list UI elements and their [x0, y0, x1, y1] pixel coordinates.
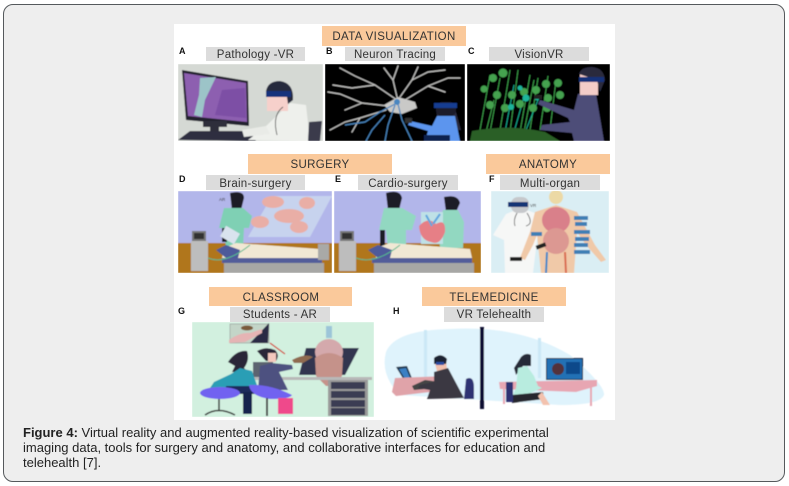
heading: telemedicine	[422, 287, 566, 306]
heading: surgery: SURGERY	[290, 159, 350, 171]
heading: telemedicine: TELEMEDICINE	[449, 292, 539, 304]
label: H VR Telehealth: H	[393, 306, 400, 316]
label: F Multi-organ: F	[489, 174, 495, 184]
label: B Neuron Tracing: B	[326, 46, 333, 56]
illustration F: multi-organ anatomy	[491, 190, 609, 273]
illustration E: cardio surgery with AR: AR	[388, 196, 395, 201]
label: H VR Telehealth	[393, 306, 544, 322]
caption: telehealth [7].	[23, 455, 101, 470]
caption: imaging data, tools for surgery and anatomy, and collaborative interfaces for education and	[23, 440, 545, 455]
label: E Cardio-surgery: E	[335, 174, 341, 184]
label: G Students-AR: Students - AR	[243, 309, 317, 321]
heading: anatomy	[486, 154, 610, 174]
caption	[23, 425, 549, 470]
illustration D: brain surgery with AR	[178, 191, 332, 273]
figure: VR and AR applications	[174, 24, 615, 420]
label: B Neuron Tracing	[326, 46, 445, 61]
label: C VisionVR	[468, 46, 589, 61]
label: F Multi-organ: Multi-organ	[520, 178, 580, 190]
illustration D: brain surgery with AR: AR	[219, 197, 226, 202]
label: F Multi-organ	[489, 174, 600, 190]
label: D Brain-surgery: Brain-surgery	[219, 178, 292, 190]
label: D Brain-surgery: D	[179, 174, 186, 184]
label: G Students-AR: G	[178, 306, 185, 316]
illustration B: neuron tracing	[325, 64, 465, 141]
label: B Neuron Tracing: Neuron Tracing	[354, 49, 436, 61]
label: C VisionVR: C	[468, 46, 475, 56]
illustration F: multi-organ anatomy: VR	[530, 203, 537, 208]
illustration H: VR telehealth	[385, 327, 604, 409]
heading: anatomy: ANATOMY	[519, 159, 577, 171]
heading: classroom	[209, 287, 352, 306]
heading: surgery	[248, 154, 392, 174]
label: C VisionVR: VisionVR	[514, 49, 564, 61]
label: D Brain-surgery	[179, 174, 305, 190]
label: E Cardio-surgery: Cardio-surgery	[368, 178, 448, 190]
label: A Pathology-VR: A	[179, 46, 186, 56]
illustration G: students with AR	[192, 322, 374, 417]
heading: data visualization: DATA VISUALIZATION	[332, 31, 456, 43]
label: G Students-AR	[178, 306, 330, 322]
illustration E: cardio surgery with AR	[334, 191, 481, 273]
illustration C: VisionVR neurons	[467, 64, 610, 141]
label: H VR Telehealth: VR Telehealth	[457, 309, 531, 321]
heading: data visualization	[322, 26, 466, 46]
illustration A: pathology VR at workstation	[178, 64, 323, 141]
label: A Pathology-VR	[179, 46, 305, 61]
caption: Figure 4: Virtual reality and augmented reality-based visualization of scientific experimental	[23, 425, 549, 440]
label: E Cardio-surgery	[335, 174, 458, 190]
label: A Pathology-VR: Pathology -VR	[217, 49, 294, 61]
heading: classroom: CLASSROOM	[243, 292, 319, 304]
